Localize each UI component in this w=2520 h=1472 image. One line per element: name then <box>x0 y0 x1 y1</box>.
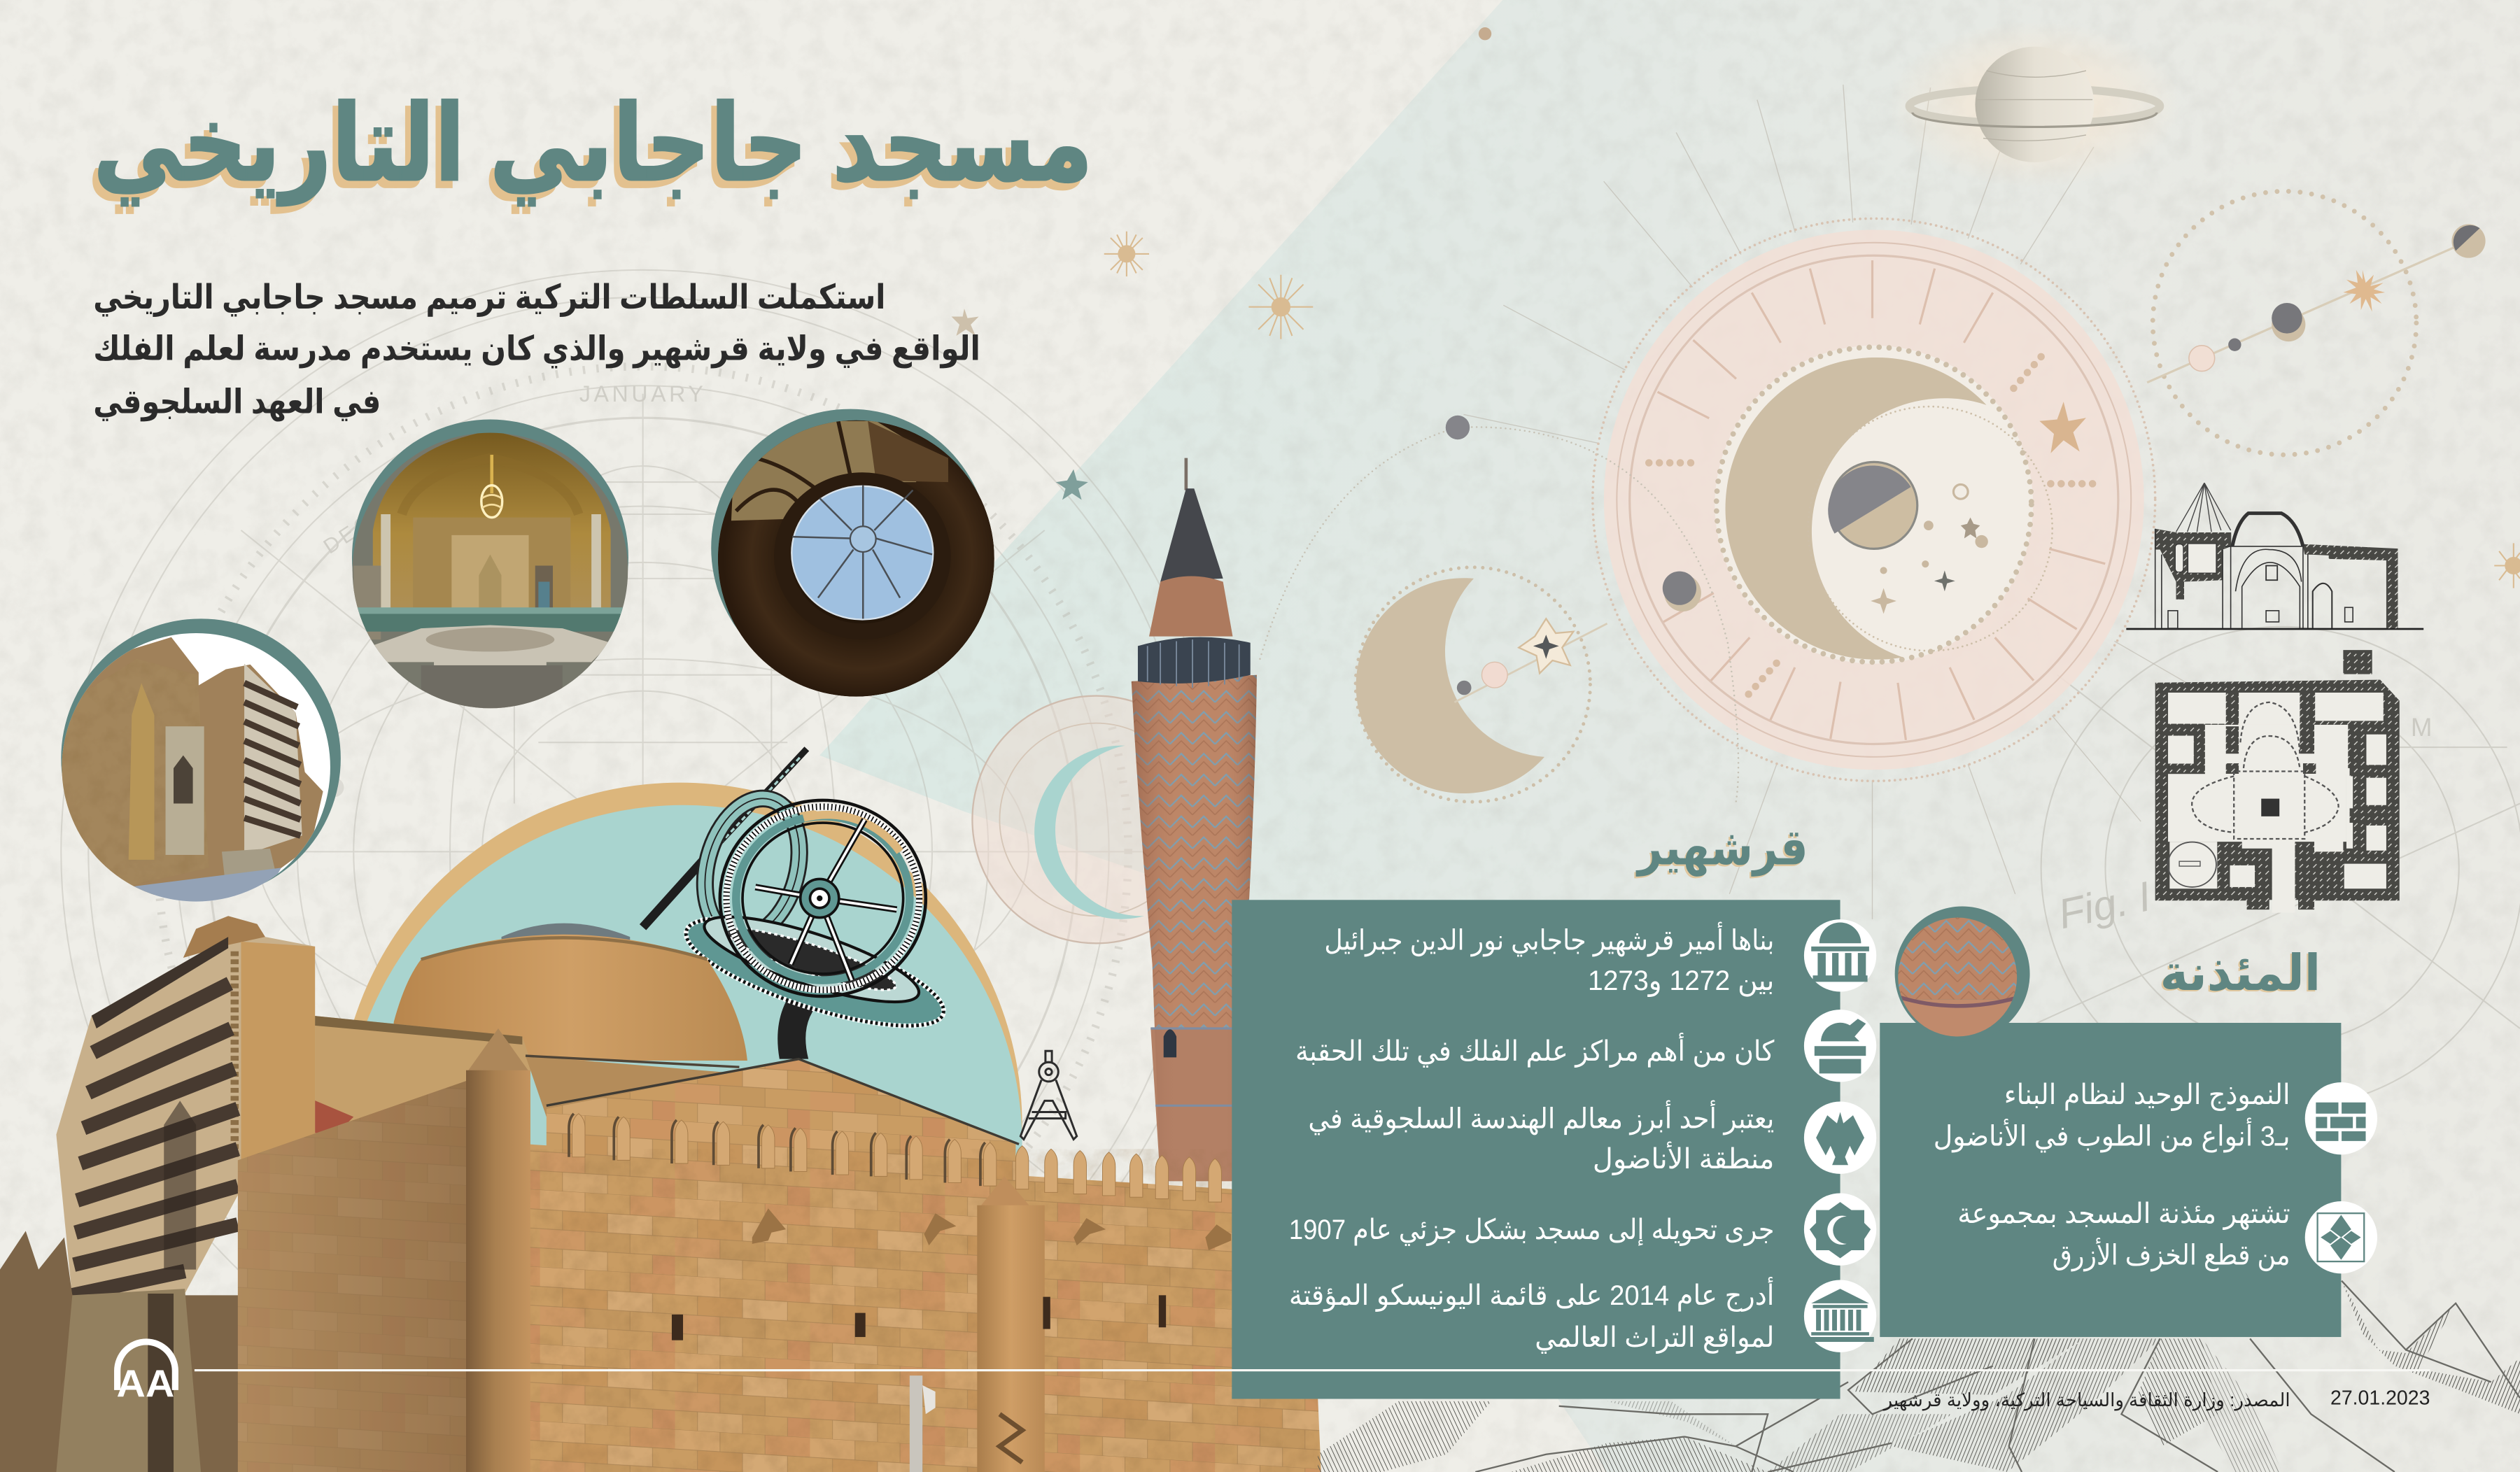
orbit and grey planet left of dial <box>1260 416 1738 803</box>
text: UNESCO list <box>1289 1277 1774 1354</box>
floor plan drawing <box>2155 650 2400 913</box>
icon: UNESCO temple <box>1804 1280 1876 1352</box>
planet alignment with dotted ring <box>2147 191 2486 455</box>
compass icon <box>1020 1051 1077 1140</box>
section drawing of mosque <box>2126 483 2423 629</box>
faint right chart: M <box>2411 713 2432 742</box>
mountain sketch <box>1318 1281 2520 1472</box>
faint astrolabe chart: JANUARY <box>579 381 706 406</box>
bead groups <box>1649 357 2102 694</box>
text: UNESCO list: لمواقع التراث العالمي <box>1535 1322 1774 1354</box>
source line: المصدر: وزارة الثقافة والسياحة التركية، وولاية قرشهير <box>1882 1389 2290 1411</box>
photo circle: stone skylight <box>711 409 994 697</box>
minaret <box>1132 458 1257 1181</box>
arch: tan and teal semicircles <box>337 783 1022 1472</box>
intro text <box>93 278 980 421</box>
shaft <box>1132 576 1257 1181</box>
panel: Kırşehir <box>1232 900 1840 1399</box>
rays around large dial <box>1463 85 2234 919</box>
rear wall <box>241 1016 530 1173</box>
icon: building dome <box>1804 919 1876 991</box>
merlons <box>569 1114 1221 1202</box>
icon: double-headed eagle <box>1804 1102 1876 1174</box>
date: 27.01.2023 <box>2330 1387 2430 1410</box>
armillary instrument <box>643 749 954 1059</box>
corner tower <box>466 1028 530 1472</box>
footer rule <box>195 1369 2430 1371</box>
faint astrolabe chart: DECEMBER <box>320 460 453 558</box>
heading: minaret: المئذنة <box>2158 947 2319 1003</box>
intro text: استكملت السلطات التركية ترميم مسجد جاجابي التاريخي <box>93 278 885 317</box>
text: blue tiles <box>1957 1198 2290 1272</box>
text: built by: بين 1272 و1273 <box>1588 965 1774 997</box>
text: three brick types: بـ3 أنواع من الطوب في الأناضول <box>1934 1118 2290 1153</box>
camera pole <box>910 1375 936 1472</box>
icon: crescent in star <box>1804 1193 1876 1266</box>
front crenellated wall <box>527 1144 1321 1472</box>
main mosque building <box>0 916 1321 1472</box>
wall windows and spouts <box>672 1208 1231 1340</box>
intro text: في العهد السلجوقي <box>93 383 381 421</box>
text: blue tiles: تشتهر مئذنة المسجد بمجموعة <box>1957 1198 2290 1230</box>
lower left portal <box>0 1231 249 1472</box>
text: astronomy centre: كان من أهم مراكز علم الفلك في تلك الحقبة <box>1295 1033 1775 1068</box>
dark planet on ring <box>1663 572 1701 611</box>
decorative sunbursts and stars <box>952 27 2520 588</box>
text: three brick types <box>1934 1079 2290 1153</box>
small pink dial with teal crescent <box>972 696 1220 943</box>
shaded side wall <box>238 1080 476 1472</box>
text: built by: بناها أمير قرشهير جاجابي نور الدين جبرائيل <box>1324 921 1774 956</box>
text: Seljuk architecture: منطقة الأناضول <box>1593 1141 1774 1175</box>
text: built by <box>1324 921 1774 997</box>
AA logo <box>114 1338 178 1405</box>
half-shaded planet <box>1828 462 1917 549</box>
base ring <box>675 897 954 1047</box>
small stars in crescent <box>1871 402 2086 614</box>
title: مسجد جاجابي التاريخي <box>87 92 1087 213</box>
photo circle: mosque exterior <box>48 618 341 910</box>
pediment <box>547 1059 1015 1181</box>
large pink moon dial <box>1593 218 2155 781</box>
text: Seljuk architecture <box>1308 1100 1774 1175</box>
heading: Kırşehir: قرشهير <box>1636 821 1808 877</box>
text: blue tiles: من قطع الخزف الأزرق <box>2053 1238 2290 1272</box>
photo circle: mosque interior <box>351 420 632 714</box>
spire <box>1160 458 1223 581</box>
skylight glass <box>791 486 933 619</box>
heading: Kırşehir: قرشهير <box>1634 822 1806 878</box>
text: converted to mosque: جرى تحويله إلى مسجد بشكل جزئي عام 1907 <box>1289 1214 1774 1246</box>
small crescent moon with dotted ring <box>1356 567 1607 802</box>
text: Seljuk architecture: يعتبر أحد أبرز معالم الهندسة السلجوقية في <box>1308 1100 1774 1135</box>
intro text: الواقع في ولاية قرشهير والذي كان يستخدم مدرسة لعلم الفلك <box>93 330 980 369</box>
saturn <box>1887 21 2183 188</box>
inner ring <box>691 788 814 948</box>
AA logo: AA <box>117 1361 174 1405</box>
icon: bricks <box>2305 1082 2377 1154</box>
title: مسجد جاجابي التاريخي <box>93 85 1093 206</box>
panel: minaret <box>1880 1023 2341 1337</box>
faint right chart: Fig. I <box>2054 872 2155 937</box>
wheel <box>720 800 926 996</box>
icon: tile pattern <box>2305 1201 2377 1273</box>
striped portal tower <box>56 916 315 1298</box>
heading: minaret: المئذنة <box>2160 946 2321 1001</box>
faint right chart <box>2025 627 2520 1109</box>
text: three brick types: النموذج الوحيد لنظام البناء <box>2004 1079 2290 1112</box>
telescope tube <box>643 749 807 927</box>
balcony <box>1138 637 1251 688</box>
dome <box>394 923 747 1061</box>
icon: observatory <box>1804 1010 1876 1082</box>
photo circle: minaret brickwork <box>1895 907 2030 1037</box>
text: UNESCO list: أدرج عام 2014 على قائمة اليونيسكو المؤقتة <box>1289 1277 1774 1312</box>
faint astrolabe chart <box>61 270 1225 1434</box>
right tower <box>977 1176 1045 1472</box>
